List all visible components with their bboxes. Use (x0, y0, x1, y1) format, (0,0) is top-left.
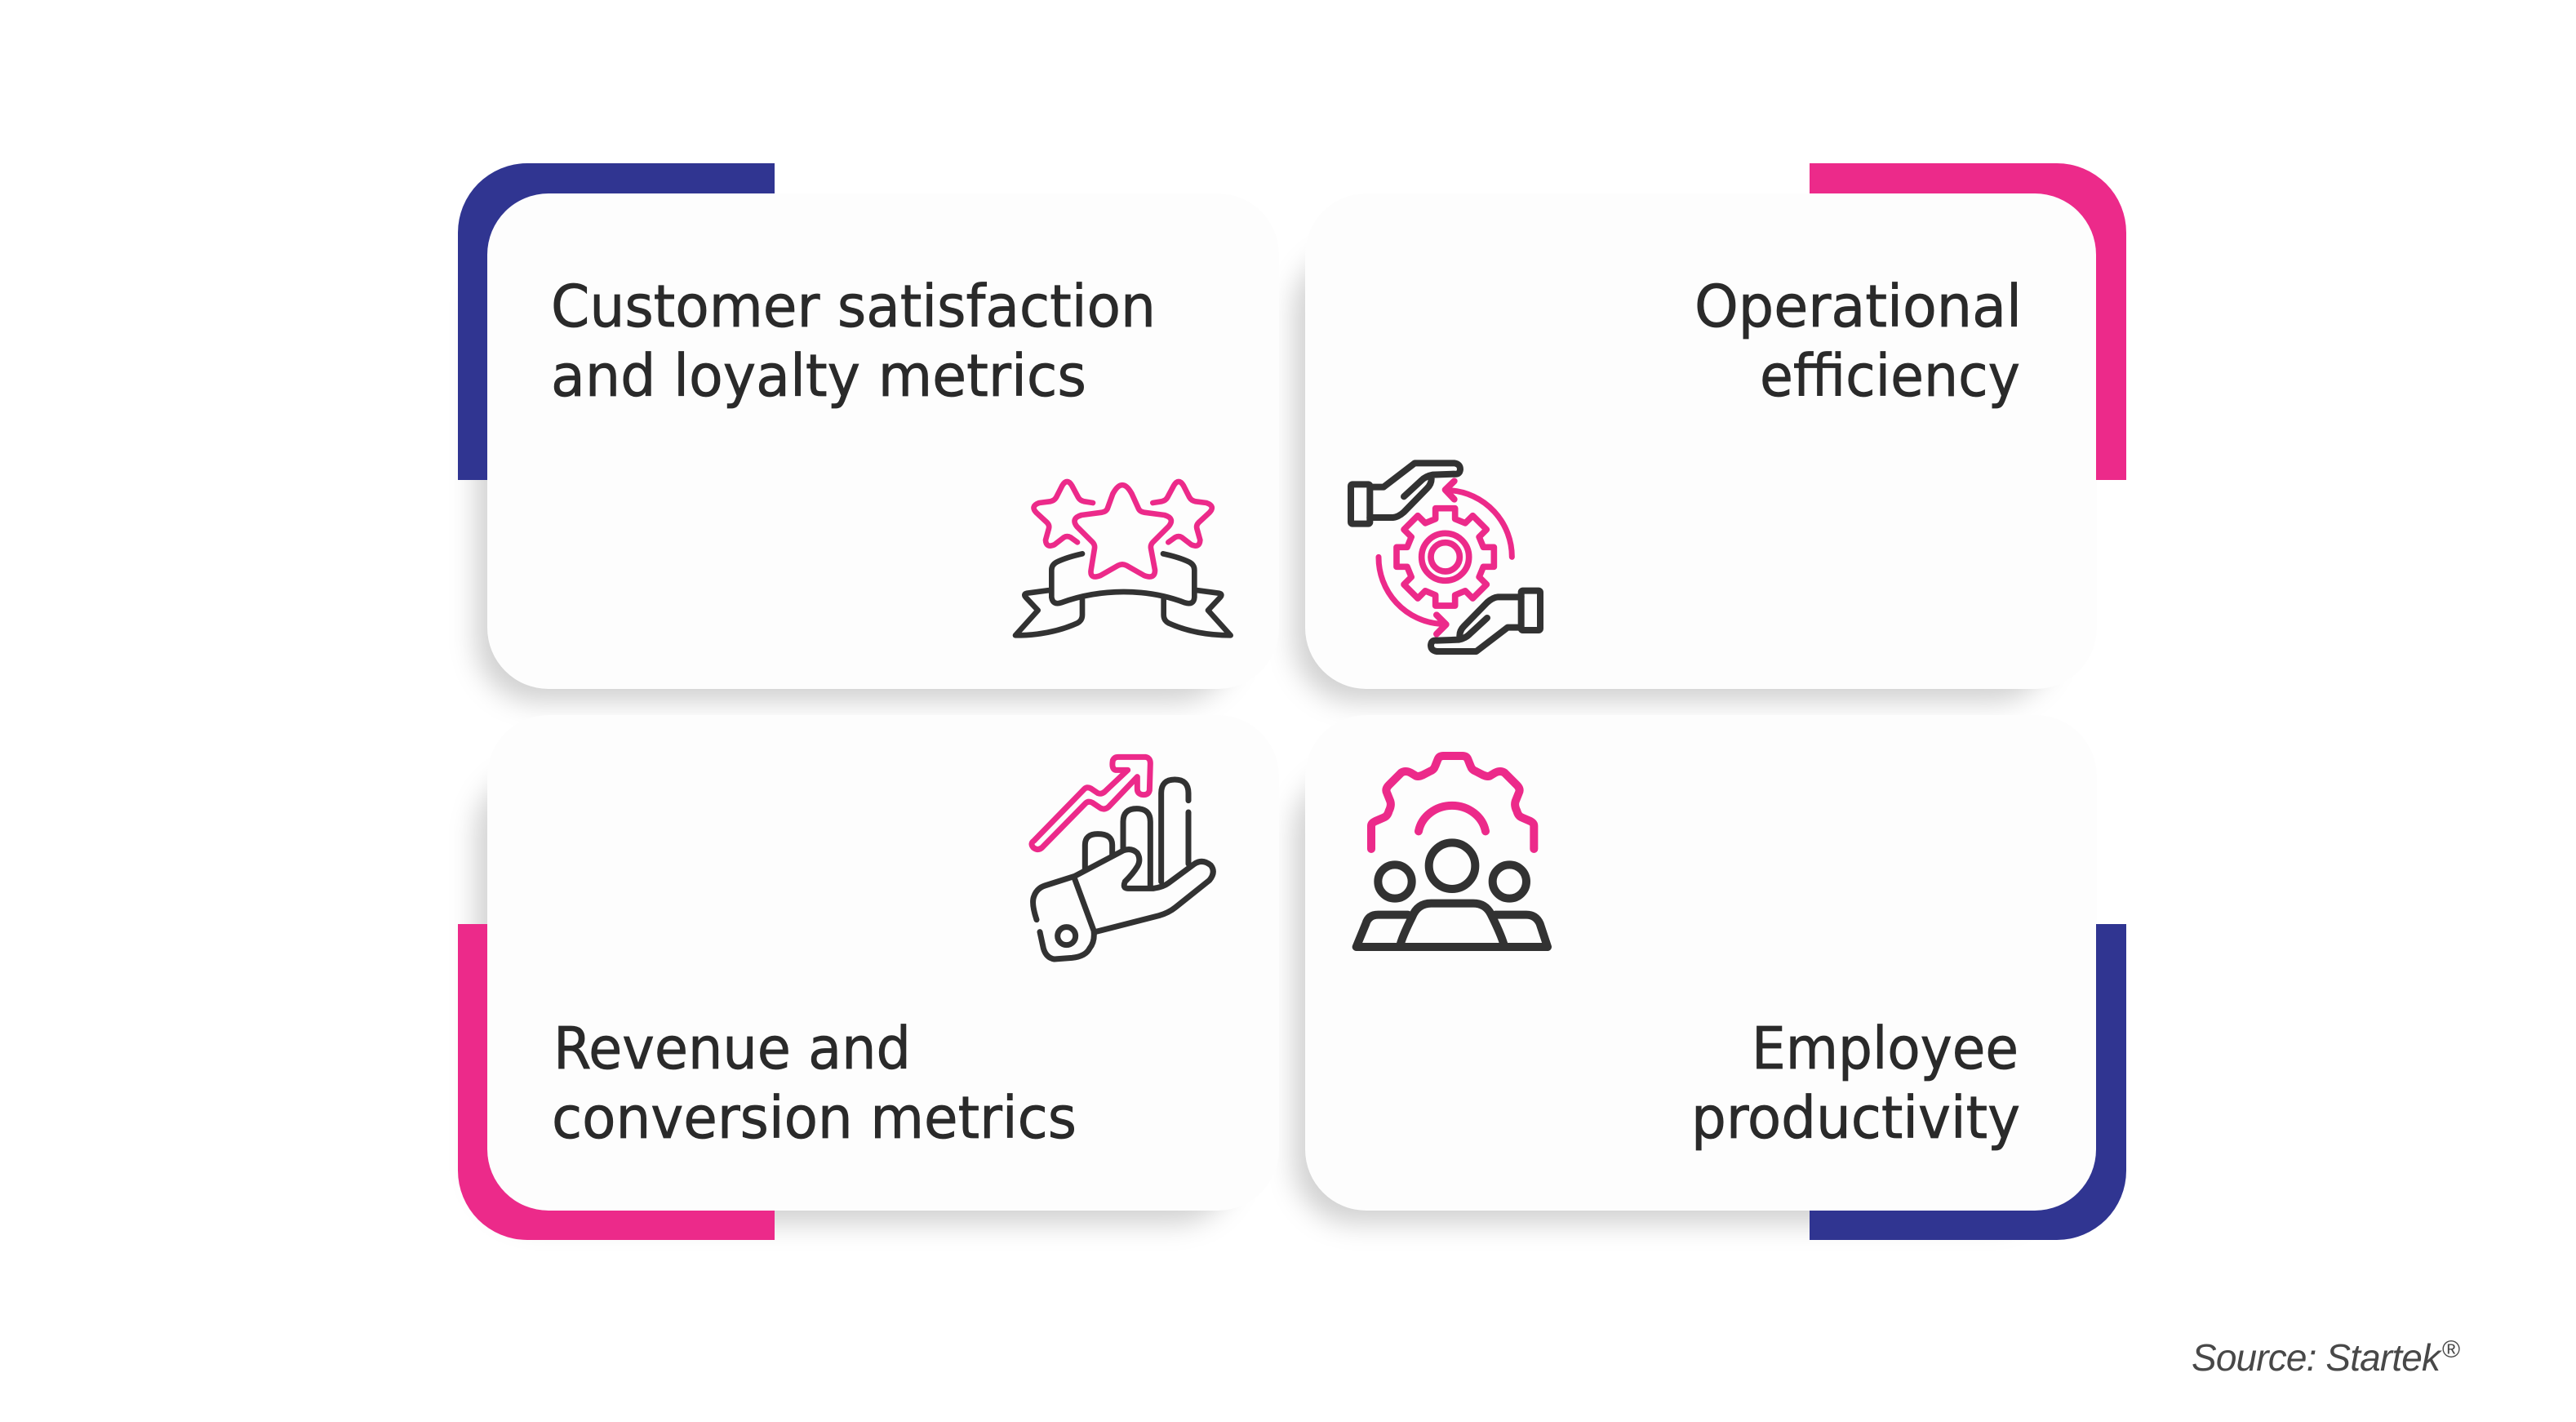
heading: customer satisfaction: and loyalty metrics (551, 342, 1086, 410)
heading: customer satisfaction: Customer satisfaction (551, 273, 1156, 340)
icon: hand with bar chart and arrow (1032, 757, 1213, 959)
icon: team with gear (1357, 756, 1548, 947)
panel: operational efficiency (1294, 163, 2126, 702)
heading: operational efficiency: Operational (1694, 273, 2022, 340)
source credit: ® (2442, 1336, 2460, 1363)
heading: employee productivity (1691, 1015, 2020, 1152)
panel: revenue and conversion metrics (458, 715, 1279, 1240)
panel: employee productivity (1294, 715, 2126, 1240)
heading: revenue and conversion metrics: Revenue and (553, 1015, 911, 1082)
heading: operational efficiency (1694, 273, 2022, 410)
icon: three stars over ribbon (1015, 482, 1231, 635)
source credit: Source: Startek (2192, 1336, 2442, 1379)
icon: gear with hands and arrows (1351, 463, 1540, 651)
heading: employee productivity: productivity (1691, 1084, 2020, 1152)
panel: customer satisfaction and loyalty metrics (458, 163, 1279, 702)
heading: employee productivity: Employee (1752, 1015, 2019, 1082)
heading: revenue and conversion metrics: conversion metrics (552, 1084, 1077, 1152)
heading: revenue and conversion metrics (552, 1015, 1077, 1152)
heading: operational efficiency: efficiency (1760, 342, 2020, 410)
heading: customer satisfaction (551, 273, 1156, 410)
